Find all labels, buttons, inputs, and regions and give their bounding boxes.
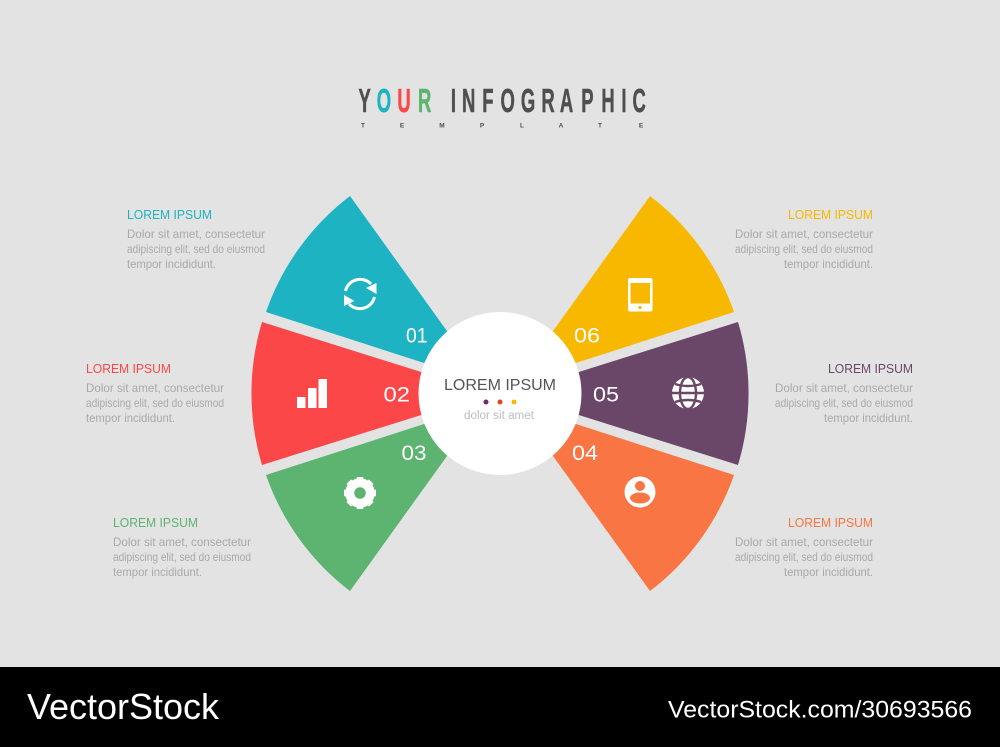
title: F bbox=[482, 82, 493, 119]
subtitle: template: P bbox=[480, 122, 485, 130]
text block: teal: LOREM IPSUM bbox=[127, 208, 212, 222]
title: G bbox=[521, 82, 535, 119]
title: Y bbox=[359, 82, 371, 119]
title: C bbox=[632, 82, 646, 119]
subtitle: template: E bbox=[400, 122, 405, 130]
title: O bbox=[377, 82, 391, 119]
footer bar bbox=[0, 667, 1000, 747]
title: I bbox=[451, 82, 456, 119]
text block: teal: tempor incididunt. bbox=[127, 257, 216, 271]
number 01: 01 bbox=[406, 324, 428, 348]
text block: green: LOREM IPSUM bbox=[113, 516, 198, 530]
segment 06: yellow bbox=[520, 196, 734, 381]
text block: red: tempor incididunt. bbox=[86, 411, 175, 425]
number 06: 06 bbox=[574, 324, 600, 348]
subtitle: template: T bbox=[598, 122, 602, 130]
text block: purple: tempor incididunt. bbox=[824, 411, 913, 425]
text block: green bbox=[113, 516, 251, 579]
segment 05: purple bbox=[520, 322, 749, 465]
title: P bbox=[581, 82, 594, 119]
text block: teal: adipiscing elit, sed do eiusmod bbox=[127, 242, 265, 256]
text block: orange bbox=[735, 516, 873, 579]
text block: green: adipiscing elit, sed do eiusmod bbox=[113, 550, 251, 564]
text block: orange: LOREM IPSUM bbox=[788, 516, 873, 530]
subtitle: template: L bbox=[520, 122, 524, 130]
subtitle: template: T bbox=[361, 122, 365, 130]
text block: purple: adipiscing elit, sed do eiusmod bbox=[775, 396, 913, 410]
text block: teal: Dolor sit amet, consectetur bbox=[127, 227, 265, 241]
text block: purple: Dolor sit amet, consectetur bbox=[775, 381, 913, 395]
text block: yellow: adipiscing elit, sed do eiusmod bbox=[735, 242, 873, 256]
title: I bbox=[621, 82, 627, 119]
title: O bbox=[500, 82, 515, 119]
text block: red bbox=[86, 362, 224, 425]
text block: orange: adipiscing elit, sed do eiusmod bbox=[735, 550, 873, 564]
text block: red: adipiscing elit, sed do eiusmod bbox=[86, 396, 224, 410]
segment 03: green bbox=[266, 406, 480, 591]
text block: red: Dolor sit amet, consectetur bbox=[86, 381, 224, 395]
text block: orange: tempor incididunt. bbox=[784, 565, 873, 579]
text block: green: Dolor sit amet, consectetur bbox=[113, 535, 251, 549]
number 04: 04 bbox=[572, 442, 598, 465]
title: U bbox=[397, 82, 411, 119]
subtitle: template: M bbox=[439, 122, 445, 130]
center heading: LOREM IPSUM bbox=[444, 377, 556, 394]
icon: globe bbox=[672, 377, 704, 409]
icon: tablet bbox=[628, 278, 652, 312]
text block: yellow: tempor incididunt. bbox=[784, 257, 873, 271]
text block: teal bbox=[127, 208, 265, 271]
title: H bbox=[601, 82, 615, 119]
number 02: 02 bbox=[384, 384, 410, 406]
text block: purple bbox=[775, 362, 913, 425]
text block: yellow bbox=[735, 208, 873, 271]
text block: purple: LOREM IPSUM bbox=[828, 362, 913, 376]
text block: yellow: Dolor sit amet, consectetur bbox=[735, 227, 873, 241]
footer logo: VectorStock bbox=[27, 686, 220, 727]
title: N bbox=[462, 82, 475, 119]
center circle bbox=[418, 312, 582, 475]
title: R bbox=[541, 82, 555, 119]
icon: user bbox=[624, 476, 656, 508]
title: A bbox=[560, 82, 573, 119]
icon: bar chart bbox=[297, 379, 327, 408]
center dots bbox=[484, 400, 516, 404]
title: R bbox=[418, 82, 431, 119]
text block: green: tempor incididunt. bbox=[113, 565, 202, 579]
icon: gear bbox=[344, 477, 376, 509]
number 03: 03 bbox=[402, 442, 426, 465]
text block: orange: Dolor sit amet, consectetur bbox=[735, 535, 873, 549]
subtitle: template: E bbox=[639, 122, 644, 130]
number 05: 05 bbox=[593, 384, 619, 406]
segment 02: red bbox=[251, 322, 480, 465]
subtitle: template bbox=[361, 122, 644, 130]
text block: red: LOREM IPSUM bbox=[86, 362, 171, 376]
icon: refresh bbox=[344, 279, 376, 309]
title bbox=[359, 82, 646, 119]
text block: yellow: LOREM IPSUM bbox=[788, 208, 873, 222]
subtitle: template: A bbox=[559, 122, 564, 130]
segment 04: orange bbox=[520, 406, 734, 591]
center subtext: dolor sit amet bbox=[464, 410, 535, 422]
segment 01: teal bbox=[266, 196, 480, 381]
footer url: VectorStock.com/30693566 bbox=[668, 696, 972, 724]
